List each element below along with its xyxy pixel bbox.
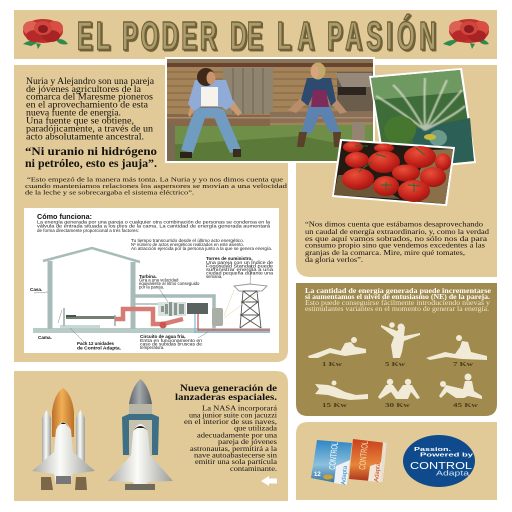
factors list: Tu tiempo transcurrido desde el último acto energético. [131,238,244,243]
right quote text block: consumo propio sino que vendemos excedentes a las [305,242,485,250]
label: turbine: equivalente al ritmo conseguido [139,281,200,286]
figure: 7 Kw [426,335,487,360]
right quote text block [305,221,489,264]
figure: 5 Kw [381,322,420,358]
intro text block: acto absolutamente ancestral. [26,132,144,142]
icon: left rose [23,19,68,49]
illustration: orange shuttle [32,388,95,490]
title: PODER [122,13,217,58]
label: cama: Cama. [38,335,52,340]
label: supply towers: ciudad pequeña durante una [206,270,274,276]
shuttle text block: nave autoabastecerse sin [194,450,277,459]
shuttle text block [184,404,278,473]
label: supply towers: Fogosidad Standard puede [206,264,274,268]
title: LA [277,13,314,58]
label: cold water circuit: caso de subidas bruscas de [140,342,203,346]
intro text block: Una fuente que se obtiene, [26,116,134,126]
energy levels text: si aumentamos el nivel de entusiasmo (NE) de la pareja. [305,294,490,301]
title: DE [230,13,262,58]
transmission tower [224,284,267,328]
product: blue box [311,440,352,485]
label: pack: de Control Adapta. [77,346,121,350]
figure: 15 Kw [315,380,368,400]
energy levels text: La cantidad de energía generada puede incrementarse [305,288,491,295]
icon: right rose [443,19,489,49]
logo badge: Powered by [420,452,475,458]
turbine [158,302,186,316]
label: supply towers: suministrar energía a una [206,267,274,272]
product: blue box: Adapta [341,465,349,485]
label: 5 Kw: 5 Kw [385,361,406,368]
quote text block [25,176,288,196]
how it works text [37,220,271,233]
energy levels text [305,288,491,313]
label: cold water circuit: temperatura. [140,345,164,350]
logo badge: Adapta [436,470,469,478]
header banner [14,10,497,59]
intro text block: de jóvenes agricultores de la [26,84,141,94]
label: 7 Kw: 7 Kw [453,361,474,368]
shuttle text block: pareja de jóvenes [218,437,277,446]
house section illustration [33,248,270,343]
label: cold water circuit: Circuito de agua fría. [140,334,186,339]
label: pack: Pack 12 unidades [77,341,114,346]
how it works text: válvula de entrada situada a los pies de la cama. La cantidad de energía generada aumentará [37,224,271,229]
label: turbine: Gira a una velocidad [139,278,179,282]
how it works text: de forma directamente proporcional a tres factores: [37,228,139,233]
shuttle text block: contaminante. [230,464,277,473]
product: red box: Adapta [374,462,382,482]
product: red box [349,439,387,482]
label: turbine: por la pareja. [139,284,164,290]
logo badge [403,435,475,487]
cold circuit pipes [198,314,270,330]
panel: space shuttles [14,371,288,501]
label: supply towers: Una pareja con un índice de [206,260,274,265]
figure: 45 Kw [439,374,482,399]
photo: sprinkler field [369,68,476,172]
panel: story and diagram [14,65,288,362]
label: casa: Casa. [30,287,42,292]
logo badge: CONTROL [410,461,473,472]
right quote text block: es que aquí vamos sobrados, no sólo nos da para [305,235,488,243]
shuttle text block: La NASA incorporará [202,404,278,413]
label: supply towers [206,256,274,279]
pump [160,322,166,328]
shuttle text block: en el interior de sus naves, [184,417,277,426]
logo badge: Passion. [414,447,452,453]
panel: how it works diagram [24,208,279,353]
quote text block: de la leche y se sobrecargaba el sistema eléctrico”. [25,190,194,196]
intro text block: nueva fuente de energía. [26,108,121,118]
heading: new shuttles [175,384,277,403]
pull quote: “Ni uranio ni hidrógeno [25,144,157,158]
intro text block: comarca del Maresme pioneros [26,92,154,102]
panel: energy levels [296,283,497,416]
figure: man [180,68,242,158]
shuttle text block: que utilizada [234,424,278,433]
how it works text: La energía generada por una pareja o cualquier otra combinación de personas se condensa en la [37,220,271,224]
shuttle text block: una junior suite con jacuzzi [189,410,277,419]
panel: sponsor [296,422,497,500]
intro text block [26,76,154,142]
intro text block: Nuria y Alejandro son una pareja [26,76,154,86]
heading: how it works: Cómo funciona: [37,212,92,221]
hot water pipe [115,309,183,324]
pull quote [25,144,157,170]
title: EL [77,13,110,58]
photo: tomatoes [332,139,455,206]
label: 30 Kw: 30 Kw [385,402,411,409]
right quote text block: da gloria verlos”. [305,256,363,264]
icon: white arrow [261,476,277,486]
generator block [187,303,208,314]
label: cold water circuit [140,334,203,350]
right quote text block: un caudal de energía extraordinario, y, como la verdad [305,228,489,236]
label: turbine [139,274,200,290]
shuttle text block: adecuadamente por una [197,431,278,440]
figure: 30 Kw [378,379,420,399]
label: pack [77,341,121,350]
product: blue box: CONTROL [327,441,340,470]
figure: 1 Kw [308,337,366,358]
energy levels text: estimulantes variantes en el momento de generar la energía. [305,306,489,313]
energy levels text: Esto puede conseguirse fácilmente introduciendo nuevas y [305,300,491,307]
label: supply towers: Torres de suministro. [206,256,253,261]
intro text block: en el aprovechamiento de esta [26,100,148,110]
tank [212,308,223,326]
shuttle text block: emitir una sola partícula [195,457,278,466]
figure: woman [288,62,347,147]
label: turbine: Turbina. [139,274,157,279]
heading: new shuttles: Nueva generación de [180,384,277,394]
factors list [131,238,272,251]
label: 45 Kw: 45 Kw [453,402,479,409]
factors list: Nº número de actos energéticos realizados en este asiento. [131,242,244,247]
photo: couple on bench [165,57,375,163]
right quote text block: granjas de la comarca. Mire, mire qué tomates, [305,249,465,257]
title [77,13,436,58]
shuttle text block: astronautas, permitirá a la [190,444,278,453]
panel: quote and photos [296,65,497,277]
product: red box: CONTROL [357,440,370,470]
pull quote: ni petróleo, esto es jauja”. [25,156,157,170]
label: 15 Kw: 15 Kw [322,402,348,409]
bed [60,308,115,328]
factors list: An atracción ejercida por la persona junto a la que se genera energía. [131,246,272,251]
heading: new shuttles: lanzaderas espaciales. [175,393,277,403]
label: cold water circuit: Entra en funcionamiento en [140,338,203,343]
label: 1 Kw: 1 Kw [322,361,343,368]
intro text block: paradójicamente, a través de un [26,124,154,134]
product: blue box: 12 [314,472,321,478]
quote text block: “Esto empezó de la manera más tonta. La Nuria y yo nos dimos cuenta que [27,176,283,184]
right quote text block: “Nos dimos cuenta que estábamos desaprovechando [305,221,483,229]
label: supply towers: semana. [206,274,222,279]
illustration: grey and blue shuttle [108,379,173,490]
quote text block: cuando manteníamos relaciones los aspersores se movían a una velocidad [25,183,288,190]
title: PASIÓN [327,13,436,58]
